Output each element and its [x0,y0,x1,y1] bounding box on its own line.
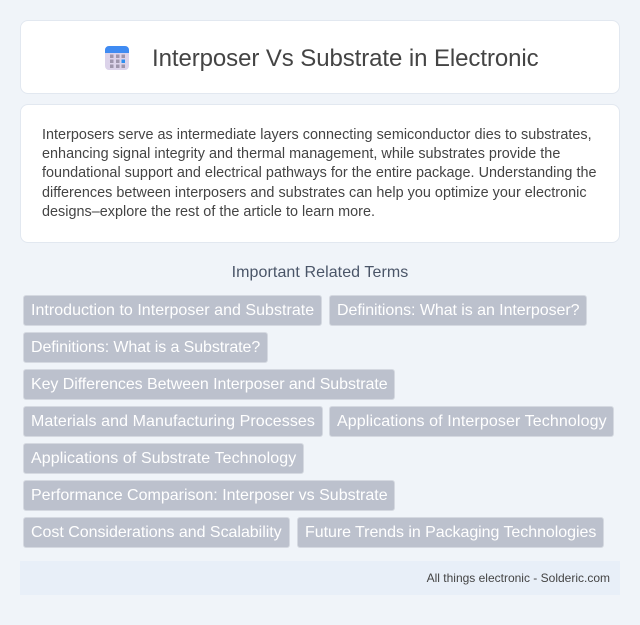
tag [23,443,304,474]
intro text [42,127,597,220]
intro text: designs–explore the rest of the article to learn more. [42,204,375,220]
intro text: Interposers serve as intermediate layers connecting semiconductor dies to substrates, [42,127,592,143]
intro text: enhancing signal integrity and thermal management, while substrates provide the [42,146,560,162]
footer bar [20,561,620,595]
tag [23,517,290,548]
icon: calendar [105,46,129,70]
tag [329,406,614,437]
tag: Future Trends in Packaging Technologies [305,524,596,541]
section heading: Important Related Terms [232,264,408,281]
header panel [20,20,620,94]
tag [23,369,395,400]
intro panel [20,104,620,243]
tag [23,406,323,437]
tag: Definitions: What is an Interposer? [337,302,579,319]
title: Interposer Vs Substrate in Electronic [152,45,539,72]
tag: Cost Considerations and Scalability [31,524,282,541]
tag: Introduction to Interposer and Substrate [31,302,314,319]
footer text: All things electronic - Solderic.com [427,571,610,585]
tag list [23,295,614,548]
tag: Performance Comparison: Interposer vs Substrate [31,487,388,504]
tag: Definitions: What is a Substrate? [31,339,260,356]
tag [23,480,395,511]
tag [23,332,268,363]
intro text: foundational support and electrical pathways for the entire package. Understanding the [42,165,597,181]
intro text: differences between interposers and substrates can help you optimize your electronic [42,185,587,201]
tag [329,295,587,326]
tag: Materials and Manufacturing Processes [31,413,315,430]
tag: Applications of Substrate Technology [31,450,296,467]
tag [297,517,604,548]
tag [23,295,322,326]
tag: Key Differences Between Interposer and Substrate [31,376,388,393]
tag: Applications of Interposer Technology [337,413,607,430]
